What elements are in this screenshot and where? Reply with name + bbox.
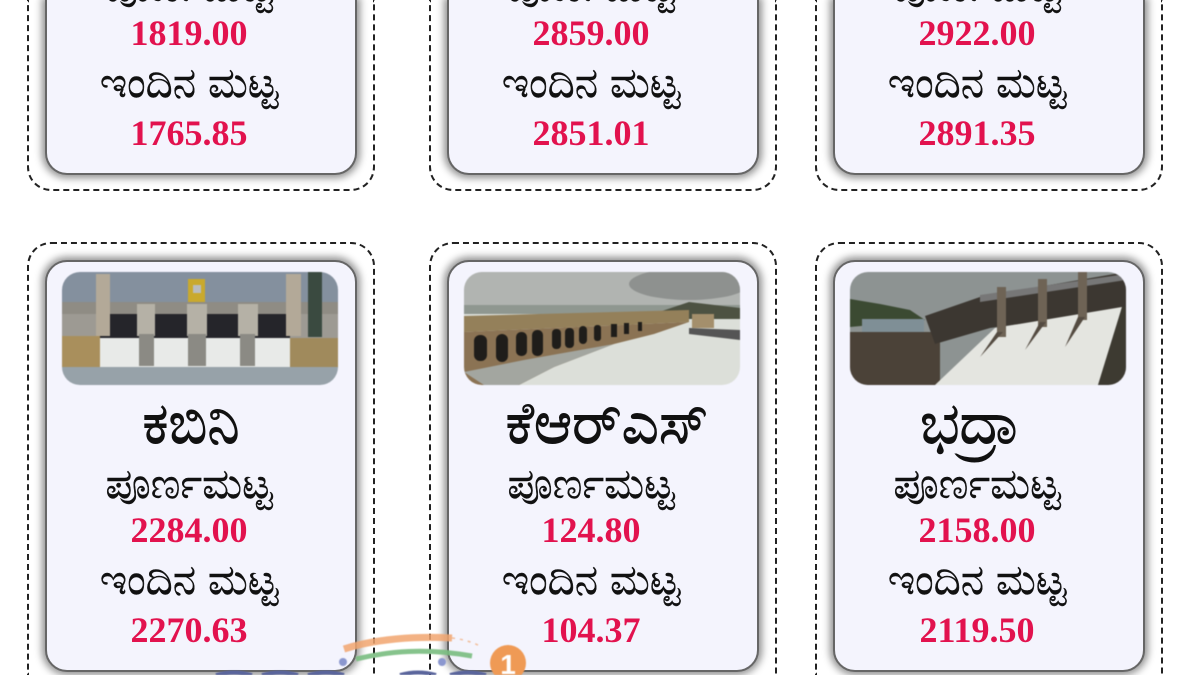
full level label: ಪೂರ್ಣಮಟ್ಟ: [105, 460, 273, 507]
dam name: ಕೆಆರ್‌ಎಸ್: [505, 391, 708, 456]
today level value: 2851.01: [532, 113, 650, 153]
full level value: 2158.00: [918, 510, 1036, 550]
logo watermark: [215, 633, 527, 675]
today level label: ಇಂದಿನ ಮಟ್ಟ: [888, 556, 1066, 603]
panel: KRS reservoir: [429, 242, 777, 675]
today level value: 2119.50: [919, 610, 1034, 650]
full level value: 2284.00: [130, 510, 248, 550]
full level value: 2922.00: [918, 13, 1036, 53]
full level value: 2859.00: [532, 13, 650, 53]
today level value: 104.37: [542, 610, 640, 650]
full level value: 1819.00: [130, 13, 248, 53]
panel: Kabini reservoir: [27, 242, 375, 675]
panel: top-middle reservoir: [429, 0, 777, 191]
today level value: 2270.63: [130, 610, 248, 650]
full level value: 124.80: [542, 510, 640, 550]
dam name: ಕಬಿನಿ: [142, 391, 240, 456]
today level label: ಇಂದಿನ ಮಟ್ಟ: [100, 59, 278, 106]
image: Kabini dam: [61, 271, 339, 386]
today level value: 2891.35: [918, 113, 1036, 153]
today level value: 1765.85: [130, 113, 248, 153]
dam name: ಭದ್ರಾ: [920, 391, 1020, 456]
today level label: ಇಂದಿನ ಮಟ್ಟ: [502, 59, 680, 106]
today level label: ಇಂದಿನ ಮಟ್ಟ: [100, 556, 278, 603]
panel: Bhadra reservoir: [815, 242, 1163, 675]
panel: top-left reservoir: [27, 0, 375, 191]
today level label: ಇಂದಿನ ಮಟ್ಟ: [502, 556, 680, 603]
today level label: ಇಂದಿನ ಮಟ್ಟ: [888, 59, 1066, 106]
image: KRS dam: [463, 271, 741, 386]
image: Bhadra dam: [849, 271, 1127, 386]
panel: top-right reservoir: [815, 0, 1163, 191]
full level label: ಪೂರ್ಣಮಟ್ಟ: [507, 460, 675, 507]
full level label: ಪೂರ್ಣಮಟ್ಟ: [893, 460, 1061, 507]
